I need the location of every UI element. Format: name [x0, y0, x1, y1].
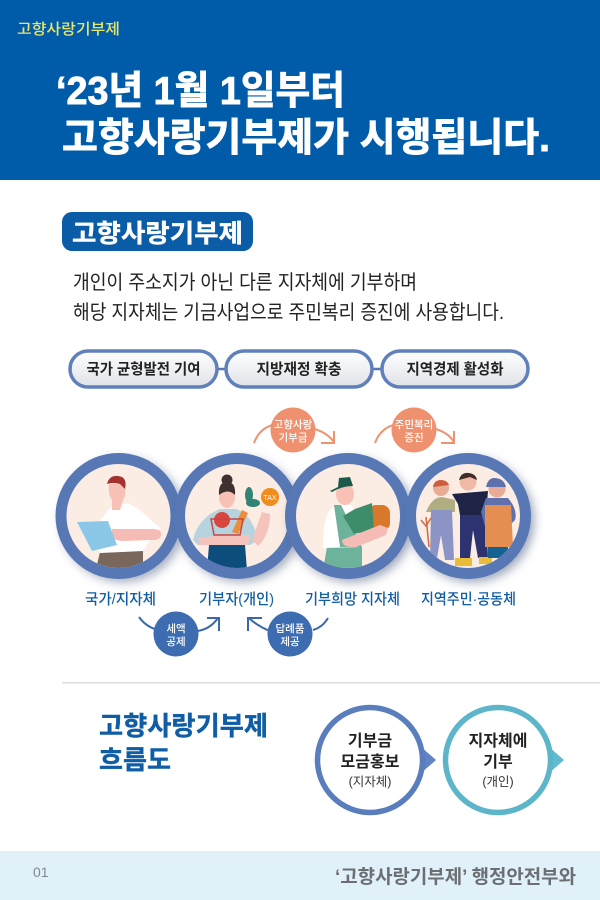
badge: gift: 답례품: [276, 622, 305, 635]
section badge: 고향사랑기부제: [72, 220, 243, 248]
flow step 1: 기부금: [348, 732, 392, 750]
flow step 1: 모금홍보: [341, 753, 400, 771]
circle: local government: [285, 453, 414, 582]
circle labels: [85, 591, 516, 608]
circle: residents: [405, 453, 534, 582]
page number: 01: [33, 864, 49, 880]
title: [56, 70, 550, 160]
flow step 2: 기부: [483, 753, 513, 771]
flow step 2: [446, 708, 564, 812]
badge: donation: 고향사랑: [274, 418, 313, 431]
header band: [0, 0, 600, 180]
circle: state: [56, 453, 185, 582]
header tag: 고향사랑기부제: [17, 21, 120, 38]
footer: [0, 851, 600, 900]
badge: tax credit: 세액: [166, 623, 186, 635]
icon: farmer with vegetables: [323, 477, 390, 570]
circle labels: 국가/지자체: [85, 591, 156, 608]
footer credit: ‘고향사랑기부제’ 행정안전부와: [335, 866, 576, 888]
bottom arrows and badges: [139, 612, 328, 656]
description: [73, 271, 504, 324]
pill: finance: 지방재정 확충: [256, 361, 342, 378]
top arrows and badges: [254, 408, 454, 452]
badge: donation: 기부금: [279, 432, 308, 444]
flow heading: [99, 711, 268, 775]
badge: gift: 제공: [280, 636, 300, 648]
circle labels: 지역주민·공동체: [421, 591, 516, 608]
flow heading: 흐름도: [99, 745, 171, 775]
section badge: [62, 212, 253, 251]
flow step 1: (지자체): [349, 775, 391, 789]
circle labels: 기부자(개인): [199, 591, 274, 608]
badge: welfare: 증진: [404, 432, 424, 444]
flow step 1: [318, 708, 436, 812]
badge: tax credit: 공제: [166, 636, 186, 648]
pill: finance: [226, 351, 372, 387]
flow step 2: (개인): [482, 775, 514, 789]
pill: economy: [382, 351, 528, 387]
pill: economy: 지역경제 활성화: [406, 361, 504, 378]
description: 해당 지자체는 기금사업으로 주민복리 증진에 사용합니다.: [73, 301, 504, 324]
circle labels: 기부희망 지자체: [305, 591, 400, 608]
title: 고향사랑기부제가 시행됩니다.: [62, 117, 550, 160]
flow heading: 고향사랑기부제: [99, 711, 268, 741]
circle: donor: [174, 453, 303, 582]
title: ‘23년 1월 1일부터: [56, 70, 345, 113]
pill: balance: 국가 균형발전 기여: [86, 361, 200, 378]
icon: three residents: [421, 473, 516, 566]
icon: woman with basket: TAX: [263, 495, 277, 502]
icon: man reading: [77, 476, 161, 569]
flow step 2: 지자체에: [469, 732, 527, 750]
description: 개인이 주소지가 아닌 다른 지자체에 기부하며: [73, 271, 417, 294]
badge: welfare: 주민복리: [395, 419, 433, 431]
badge: gift: [268, 612, 312, 656]
badge: tax credit: [154, 612, 198, 656]
goal pills: [70, 351, 528, 387]
badge: welfare: [392, 408, 436, 452]
pill: balance: [70, 351, 217, 387]
badge: donation: [270, 408, 316, 452]
